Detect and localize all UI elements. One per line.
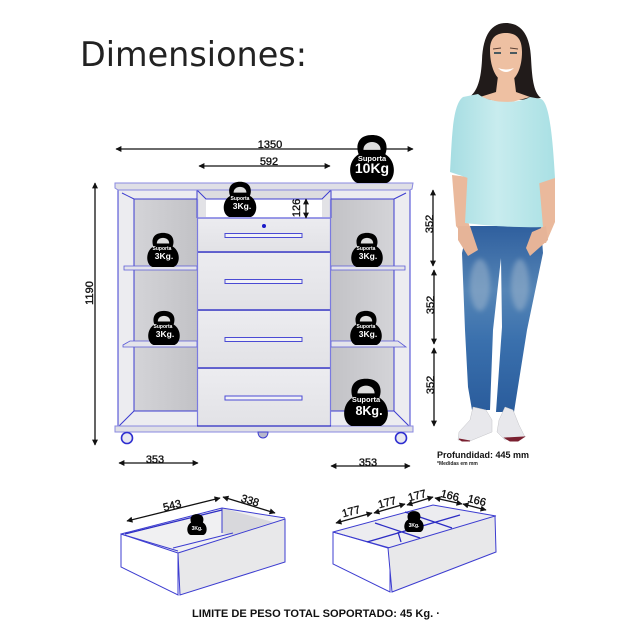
- central niche: [197, 190, 331, 218]
- weight: 3Kg niche: 3Kg.: [233, 201, 251, 211]
- dimension: 338: 338: [239, 493, 260, 510]
- dimension: 352 lower: 352: [425, 376, 437, 394]
- shirt: [450, 94, 555, 227]
- jeans: [462, 226, 543, 412]
- right arm: [532, 178, 555, 243]
- top slab: [115, 183, 413, 190]
- drawer 4: [198, 368, 330, 426]
- weight: 8Kg: 8Kg.: [355, 404, 383, 418]
- weight: 3Kg upper left shelf: 3Kg.: [155, 251, 173, 261]
- dimension: 177 second: 177: [377, 495, 398, 511]
- drawer 2: [198, 252, 330, 309]
- dimension: 592: [199, 156, 330, 168]
- right compartment: [331, 190, 410, 426]
- weight: 3Kg lower right shelf: 3Kg.: [359, 329, 377, 339]
- weight: 3Kg lower right shelf: [350, 311, 382, 345]
- weight: 10Kg: 10Kg: [355, 160, 389, 176]
- weight: 3Kg upper right shelf: Suporta: [357, 246, 376, 252]
- dividers: [367, 512, 460, 542]
- dimension: 126: 126: [291, 199, 303, 217]
- weight: 10Kg: [350, 135, 394, 183]
- drawer 3: [198, 310, 330, 367]
- weight: 3Kg upper right shelf: 3Kg.: [359, 251, 377, 261]
- dimension: 166 second: 166: [466, 493, 487, 509]
- dimension: 177 first: 177: [341, 504, 362, 520]
- dimension: 353 right: [331, 457, 410, 469]
- eyes: [494, 52, 517, 54]
- left compartment: [118, 190, 197, 426]
- dimension: 338: [223, 493, 275, 513]
- dimension: 352 upper: 352: [424, 215, 436, 233]
- weight: 3Kg lower left shelf: [148, 311, 180, 345]
- dimension: 177 first: [336, 504, 372, 523]
- cabinet illustration: [115, 183, 413, 444]
- dimension: 543: [127, 498, 220, 521]
- right shoe: [497, 407, 525, 440]
- eyebrows: [493, 48, 518, 49]
- depth note: [437, 450, 529, 467]
- drawer 1: [198, 218, 330, 251]
- face and neck: [480, 33, 530, 104]
- weight: 3Kg lower right shelf: Suporta: [357, 324, 376, 330]
- dimension: 352 lower: [425, 348, 437, 426]
- title: Dimensiones:: [80, 35, 307, 75]
- weight: 8Kg: Suporta: [352, 395, 381, 404]
- dimension: 352 middle: 352: [425, 296, 437, 314]
- wheels: [122, 432, 406, 444]
- depth note: *Medidas em mm: [437, 461, 478, 467]
- weight: 3Kg divided drawer: [404, 511, 424, 532]
- left arm: [452, 175, 474, 240]
- dimension: 352 middle: [425, 270, 437, 344]
- weight: 3Kg niche: Suporta: [231, 196, 250, 202]
- dimension: 353 left: 353: [146, 454, 164, 466]
- woman figure: [450, 23, 555, 441]
- hair: [468, 23, 541, 100]
- weight: 3Kg upper left shelf: [147, 233, 179, 267]
- drawer with dividers: [333, 488, 496, 592]
- dimension: 166 first: 166: [439, 488, 460, 504]
- weight: 3Kg niche: [224, 182, 256, 217]
- weight: 3Kg divided drawer: 3Kg.: [409, 523, 420, 529]
- dimension: 543: 543: [162, 498, 183, 514]
- dimension: 353 left: [119, 454, 198, 466]
- weight: 3Kg upper right shelf: [351, 233, 383, 267]
- dimension: 353 right: 353: [359, 457, 377, 469]
- weight: 3Kg plain drawer: [187, 514, 207, 535]
- dimension: 1350: 1350: [258, 139, 282, 151]
- plain drawer: [121, 493, 285, 595]
- left shoe: [458, 407, 492, 441]
- weight: 3Kg upper left shelf: Suporta: [153, 246, 172, 252]
- dimension: 352 upper: [424, 190, 436, 266]
- dimension: 1190: 1190: [84, 281, 96, 305]
- dimension: 592: 592: [260, 156, 278, 168]
- weight: 3Kg plain drawer: 3Kg.: [192, 526, 203, 532]
- base slab: [115, 426, 413, 432]
- jeans fading: [470, 259, 529, 311]
- depth note: Profundidad: 445 mm: [437, 450, 529, 460]
- mouth: [498, 68, 514, 72]
- weight: 3Kg lower left shelf: Suporta: [154, 324, 173, 330]
- dimension: 177 second: [374, 495, 405, 513]
- weight: 8Kg: [344, 379, 388, 426]
- weight: 10Kg: Suporta: [358, 154, 387, 163]
- total weight limit: LIMITE DE PESO TOTAL SOPORTADO: 45 Kg. ·: [192, 608, 440, 620]
- hands on jeans: [458, 226, 548, 256]
- dimension: 177 third: 177: [407, 488, 428, 504]
- weight: 3Kg lower left shelf: 3Kg.: [156, 329, 174, 339]
